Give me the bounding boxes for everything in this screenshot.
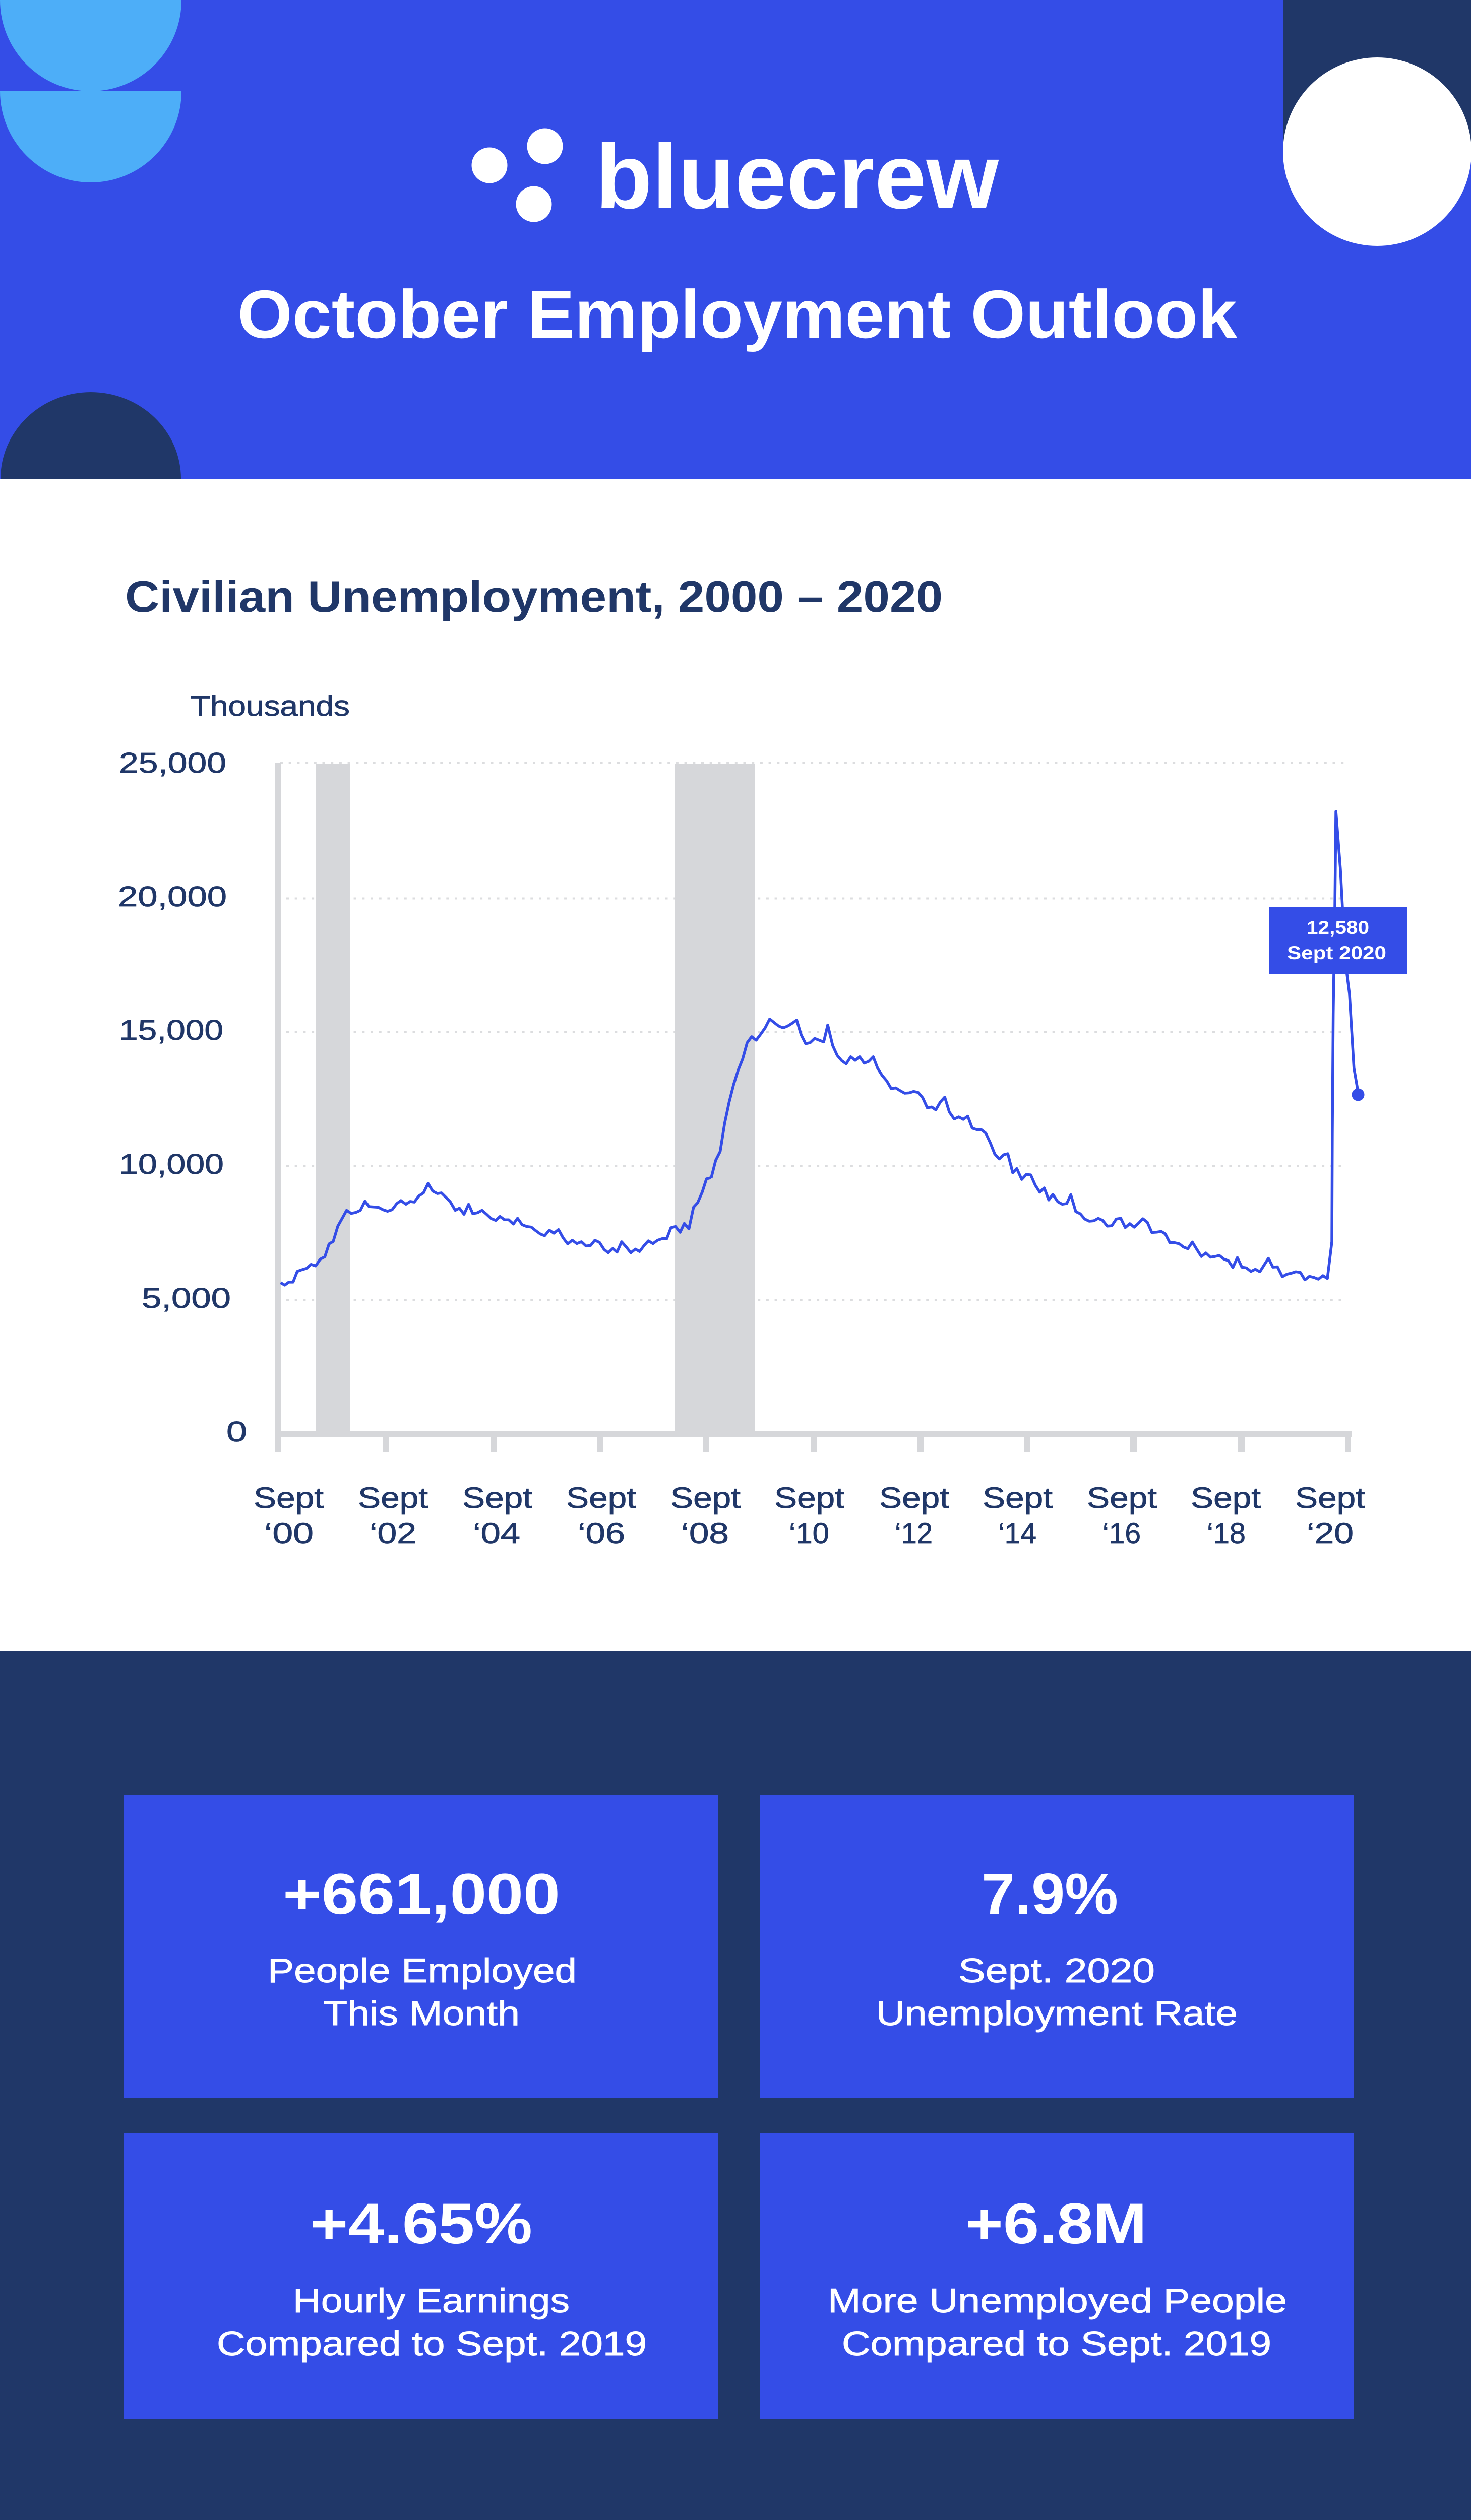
x axis labels: ‘14	[998, 1517, 1036, 1550]
x axis labels: ‘10	[789, 1517, 829, 1550]
x axis labels: ‘18	[1207, 1517, 1246, 1550]
y axis labels	[118, 747, 247, 1448]
x axis labels: Sept	[358, 1482, 428, 1515]
x axis labels: Sept	[879, 1482, 949, 1515]
x axis labels	[254, 1482, 1365, 1550]
decorative white circle top right	[1283, 57, 1471, 246]
y axis labels: 5,000	[142, 1282, 231, 1314]
stat card: unemployment rate: Sept. 2020	[958, 1951, 1155, 1990]
stat card: unemployment rate: 7.9%	[982, 1862, 1118, 1926]
x axis labels: Sept	[1295, 1482, 1365, 1515]
stat card: hourly earnings: Hourly Earnings	[293, 2282, 570, 2320]
chart heading: Civilian Unemployment, 2000 – 2020	[125, 572, 943, 621]
logo: bluecrew	[472, 125, 999, 228]
stat card: more unemployed: Compared to Sept. 2019	[842, 2324, 1271, 2363]
stat card: people employed: +661,000	[283, 1862, 560, 1926]
x axis labels: ‘16	[1102, 1517, 1141, 1550]
y axis labels: 20,000	[118, 880, 227, 913]
x axis labels: Sept	[670, 1482, 741, 1515]
y axis unit label: Thousands	[191, 690, 350, 722]
x axis labels: Sept	[983, 1482, 1053, 1515]
x axis labels: Sept	[774, 1482, 844, 1515]
callout: 12,580 Sept 2020	[1269, 907, 1407, 974]
unemployment line	[281, 811, 1359, 1285]
panel: navy stats section	[0, 1651, 1471, 2520]
x axis labels: ‘12	[895, 1517, 933, 1550]
x axis labels: ‘06	[578, 1517, 625, 1550]
x axis labels: Sept	[462, 1482, 532, 1515]
stat card: hourly earnings	[124, 2133, 718, 2419]
x axis labels: ‘20	[1307, 1517, 1354, 1550]
x axis labels: Sept	[1087, 1482, 1157, 1515]
y axis labels: 10,000	[119, 1148, 224, 1180]
callout: 12,580 Sept 2020: 12,580	[1307, 917, 1369, 938]
x axis labels: Sept	[254, 1482, 324, 1515]
x axis labels: ‘04	[473, 1517, 520, 1550]
chart axes and ticks	[275, 763, 1352, 1452]
logo wordmark: bluecrew	[595, 125, 999, 228]
stat card: hourly earnings: +4.65%	[310, 2192, 532, 2256]
callout: 12,580 Sept 2020: Sept 2020	[1287, 942, 1386, 963]
y axis labels: 0	[226, 1416, 247, 1448]
x axis labels: Sept	[1191, 1482, 1261, 1515]
y axis labels: 15,000	[119, 1014, 223, 1046]
stat card: people employed	[124, 1795, 718, 2098]
stat card: people employed: This Month	[323, 1994, 520, 2033]
recession band 2008	[675, 764, 755, 1431]
stat card: hourly earnings: Compared to Sept. 2019	[217, 2324, 647, 2363]
decorative navy block top right	[1283, 0, 1471, 152]
main title: October Employment Outlook	[237, 276, 1238, 352]
x axis labels: ‘00	[264, 1517, 314, 1550]
decorative navy semicircle bottom left	[1, 392, 181, 479]
stat card: people employed: People Employed	[268, 1951, 577, 1990]
y axis labels: 25,000	[119, 747, 226, 779]
stat card: unemployment rate	[760, 1795, 1354, 2098]
header panel	[0, 0, 1471, 479]
decorative light-blue semicircle second	[0, 91, 181, 182]
x axis labels: ‘08	[681, 1517, 729, 1550]
panel: unemployment chart	[0, 479, 1471, 1651]
stat card: unemployment rate: Unemployment Rate	[876, 1994, 1238, 2033]
x axis labels: Sept	[566, 1482, 636, 1515]
end point marker	[1352, 1089, 1364, 1101]
decorative light-blue semicircle top	[0, 0, 181, 91]
recession band 2001	[316, 764, 350, 1431]
logo dots icon	[472, 128, 563, 222]
stat card: more unemployed: More Unemployed People	[828, 2282, 1287, 2320]
x axis labels: ‘02	[370, 1517, 416, 1550]
stat card: more unemployed: +6.8M	[965, 2192, 1147, 2256]
stat card: more unemployed	[760, 2133, 1354, 2419]
